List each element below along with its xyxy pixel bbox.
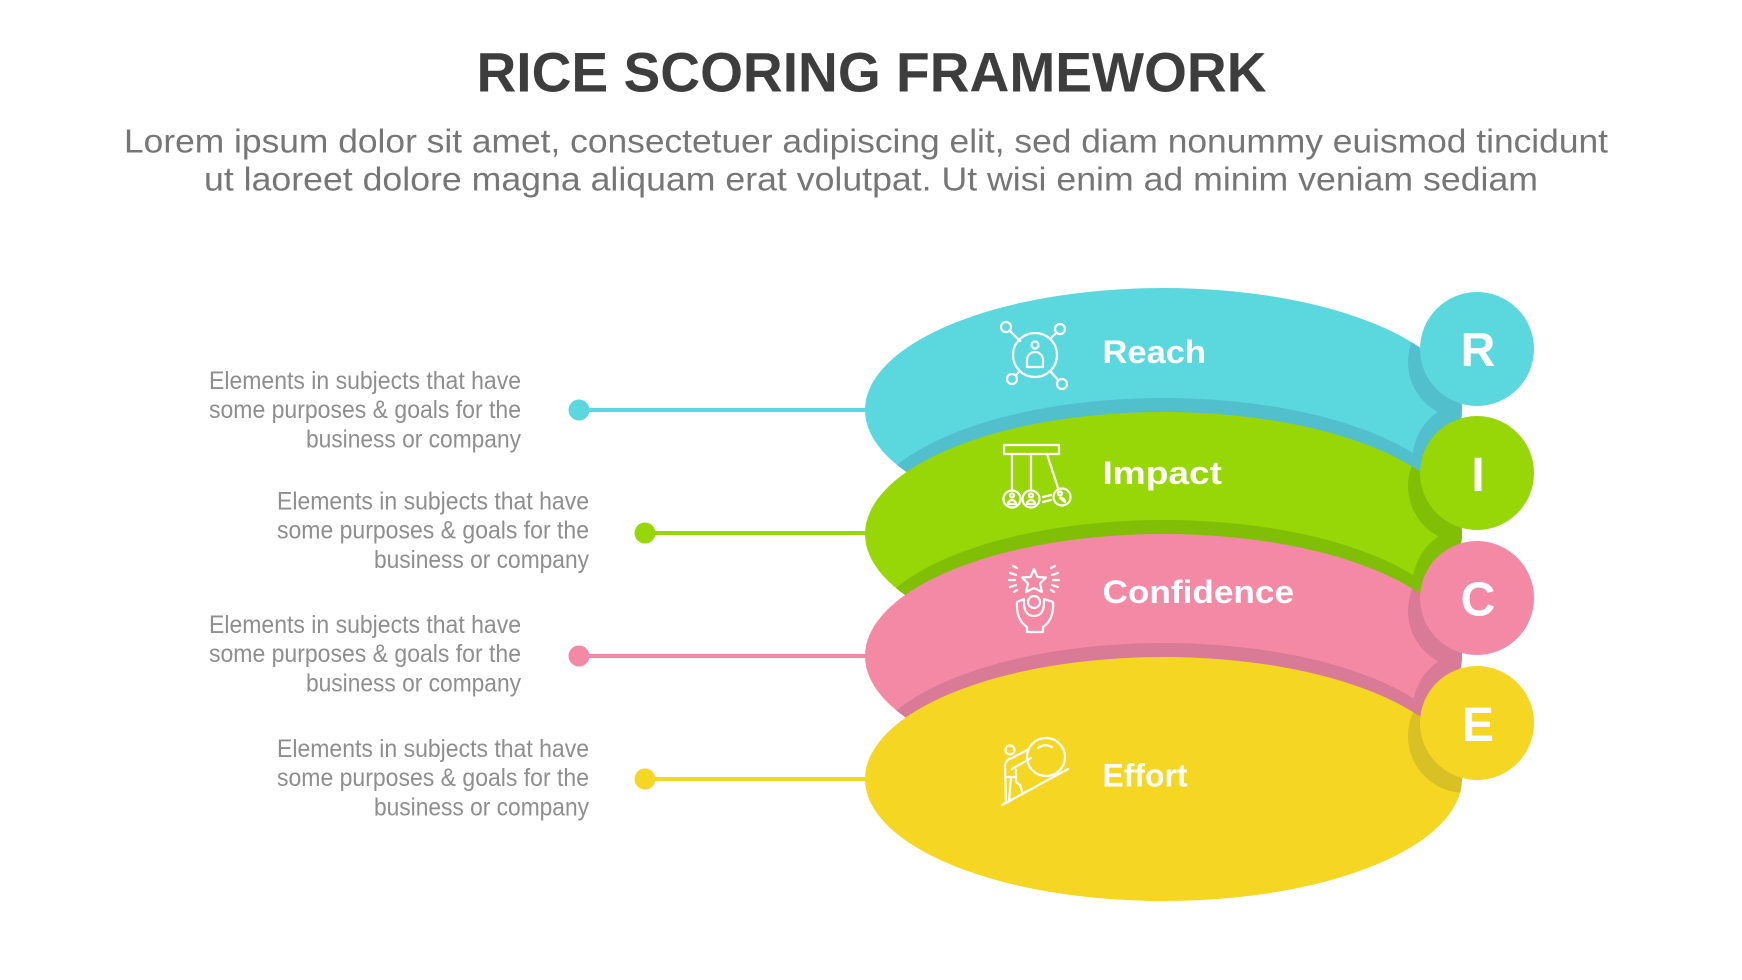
text block: effort description: Elements in subjects that have bbox=[277, 735, 589, 763]
text block: impact description: business or company bbox=[374, 546, 589, 574]
letter: R: R bbox=[1461, 324, 1495, 377]
letter: I: I bbox=[1471, 449, 1485, 502]
text block: effort description bbox=[277, 735, 589, 822]
text block: reach description: business or company bbox=[306, 426, 521, 454]
text block: impact description: Elements in subjects that have bbox=[277, 488, 589, 516]
text block: confidence description bbox=[209, 611, 521, 698]
label: Effort: Effort bbox=[1102, 758, 1188, 794]
label: Reach: Reach bbox=[1102, 334, 1206, 370]
icon: hands raised with star bbox=[1009, 566, 1059, 632]
label: Confidence: Confidence bbox=[1102, 574, 1294, 610]
connector: confidence bbox=[568, 646, 870, 666]
text block: reach description: Elements in subjects that have bbox=[209, 367, 521, 395]
text block: confidence description: Elements in subjects that have bbox=[209, 611, 521, 639]
subtitle bbox=[124, 122, 1608, 198]
title: RICE SCORING FRAMEWORK bbox=[476, 40, 1266, 104]
label: Impact: Impact bbox=[1102, 455, 1222, 491]
panel: reach bbox=[865, 288, 1534, 472]
connector: reach bbox=[568, 400, 870, 420]
icon: network person bbox=[1001, 322, 1067, 389]
text block: confidence description: business or company bbox=[306, 670, 521, 698]
text block: effort description: some purposes & goals for the bbox=[277, 764, 589, 792]
text block: effort description: business or company bbox=[374, 794, 589, 822]
icon: person pushing boulder bbox=[1002, 738, 1068, 805]
subtitle: Lorem ipsum dolor sit amet, consectetuer adipiscing elit, sed diam nonummy euismod tincidunt bbox=[124, 122, 1608, 160]
connector: impact bbox=[634, 522, 870, 544]
text block: reach description bbox=[209, 367, 521, 454]
text block: reach description: some purposes & goals for the bbox=[209, 396, 521, 424]
text block: confidence description: some purposes & goals for the bbox=[209, 640, 521, 668]
text block: impact description: some purposes & goals for the bbox=[277, 516, 589, 544]
panel: confidence bbox=[865, 534, 1534, 718]
text block: impact description bbox=[277, 488, 589, 574]
icon: newton's cradle bbox=[1004, 445, 1070, 508]
panel: impact bbox=[865, 412, 1534, 595]
letter: C: C bbox=[1461, 574, 1495, 626]
panel: effort bbox=[865, 657, 1534, 901]
letter: E: E bbox=[1462, 699, 1494, 752]
subtitle: ut laoreet dolore magna aliquam erat volutpat. Ut wisi enim ad minim veniam sediam bbox=[204, 160, 1538, 198]
connector: effort bbox=[634, 768, 870, 790]
